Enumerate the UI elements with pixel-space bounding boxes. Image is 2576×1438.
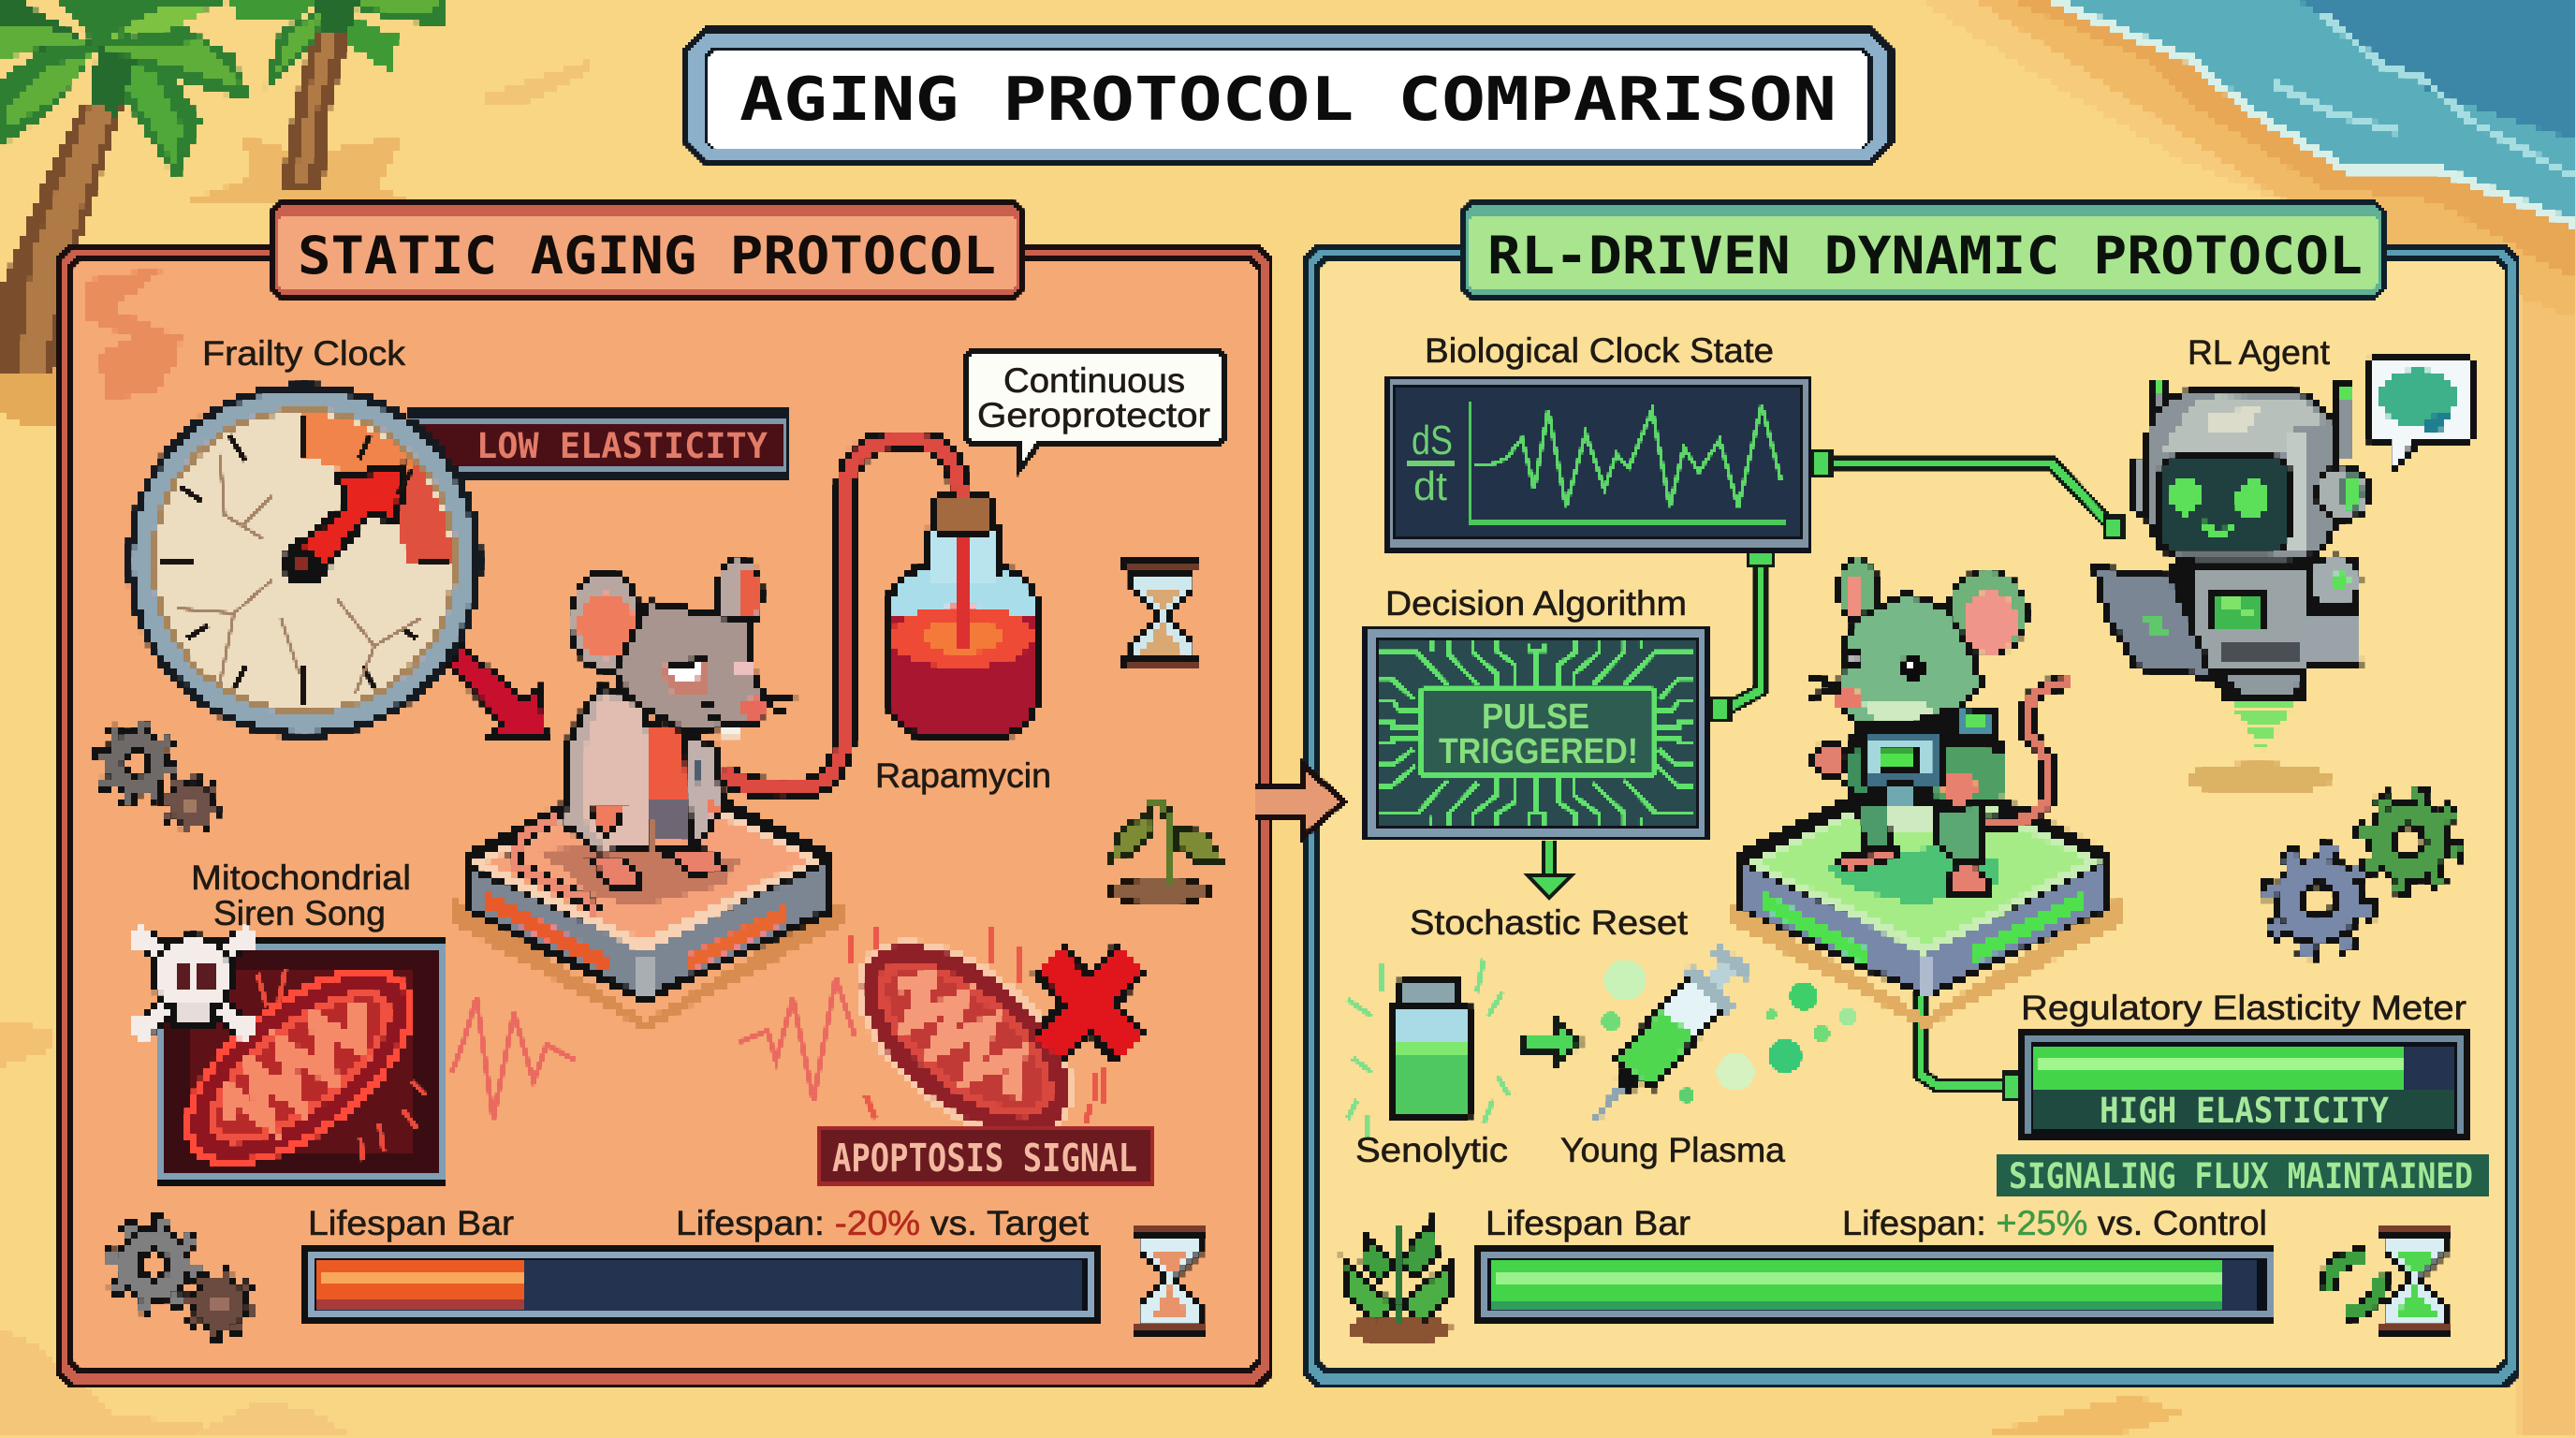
icon: hover shadow: [2186, 763, 2332, 795]
callout: continuous geroprotector: Continuous: [1003, 361, 1185, 400]
icon: sprout: [1343, 1219, 1453, 1343]
chart: pulse triggered decision board: TRIGGERED!: [1439, 732, 1638, 771]
icon: hover beam stripes: [2228, 708, 2293, 743]
icon: siren sparks: [257, 969, 426, 1161]
label: decision algorithm: Decision Algorithm: [1385, 584, 1687, 623]
lifespan bar frame left: [302, 1246, 1098, 1326]
icon: palm trees: [0, 0, 447, 374]
speech bubble: brain: [2364, 354, 2474, 476]
icon: red x: [1048, 959, 1131, 1049]
icon: rl agent robot: [2095, 377, 2372, 752]
label: senolytic: Senolytic: [1355, 1131, 1508, 1169]
label: lifespan bar dynamic: Lifespan Bar: [1486, 1204, 1690, 1242]
panel: static aging protocol: [56, 199, 1273, 1388]
label: lifespan minus 20 percent: Lifespan: -20% vs. Target: [676, 1204, 1090, 1242]
badge: apoptosis signal: [817, 1126, 1154, 1186]
panel: rl-driven dynamic protocol: [1303, 199, 2520, 1388]
icon: damaged mitochondrion: [820, 902, 1110, 1177]
illustrations: static protocol: [99, 383, 1222, 1336]
badge: low elasticity: LOW ELASTICITY: [476, 426, 768, 466]
chart: biological clock state monitor: dS: [1412, 418, 1453, 463]
title banner: [681, 26, 1895, 166]
illustrations: dynamic protocol: [1343, 354, 2474, 1343]
icon: senolytic vial: [1386, 978, 1475, 1120]
chart: regulatory elasticity meter fill: HIGH ELASTICITY: [2100, 1091, 2390, 1131]
regulatory meter frame: [2019, 1032, 2468, 1142]
chart: regulatory elasticity meter fill: [2033, 1047, 2454, 1131]
header: static aging protocol: STATIC AGING PROTOCOL: [298, 226, 996, 286]
callout: continuous geroprotector: [962, 349, 1228, 477]
icon: gears upper: [99, 726, 217, 830]
badge: low elasticity: [406, 408, 790, 479]
icon: plasma particles: [1602, 960, 1856, 1103]
chart: lifespan bar static: [316, 1260, 1082, 1311]
icon: green rl mouse in armor: [1809, 556, 2069, 892]
icon: wilted plant: [1108, 803, 1222, 906]
icon: skull and crossbones: [130, 927, 257, 1040]
chart: pulse triggered decision board: PULSE: [1482, 697, 1589, 737]
icon: young plasma syringe: [1573, 937, 1759, 1138]
icon: gears lower: [111, 1223, 251, 1335]
chart: red signal wave right: [739, 977, 855, 1100]
label: young plasma: Young Plasma: [1560, 1131, 1785, 1169]
chart: static protocol fine details: [161, 417, 1105, 1161]
icon: hourglass upper: [1123, 559, 1201, 671]
icon: clock ticks and cracks: [161, 417, 449, 704]
arrow: decline: [449, 646, 546, 738]
badge: apoptosis signal: APOPTOSIS SIGNAL: [832, 1136, 1137, 1181]
callout: continuous geroprotector: Geroprotector: [977, 396, 1210, 434]
chart: pulse triggered decision board: [1362, 625, 1710, 841]
panel: mitochondrial siren song: [151, 931, 448, 1204]
connectors: green data lines: [1711, 450, 2123, 1099]
label: biological clock state: Biological Clock State: [1425, 331, 1774, 370]
fine details: dynamic protocol: [1348, 708, 2293, 1137]
lifespan bar frame right: [1477, 1246, 2274, 1326]
icon: small reset arrow: [1525, 1020, 1582, 1065]
icon: sparks: [852, 927, 1105, 1123]
chart: biological clock state monitor: dt: [1413, 463, 1447, 509]
label: lifespan bar static: Lifespan Bar: [308, 1204, 514, 1242]
icon: rapamycin flask with iv line: [723, 442, 1043, 789]
title banner: AGING PROTOCOL COMPARISON: [739, 66, 1837, 135]
icon: frailty clock: [126, 383, 482, 739]
background: ocean and foam: [2052, 0, 2576, 225]
arrow: static to dynamic: [1256, 758, 1348, 844]
label: frailty clock: Frailty Clock: [202, 334, 406, 373]
icon: senolytic sparkles: [1348, 960, 1509, 1137]
icon: gears dynamic: [2269, 794, 2456, 950]
label: mitochondrial siren song: [191, 858, 411, 932]
badge: signaling flux maintained: SIGNALING FLUX MAINTAINED: [2009, 1156, 2473, 1196]
icon: old gray mouse in lab coat: [516, 556, 796, 915]
icon: hourglass lower: [1134, 1224, 1208, 1336]
label: rl agent: RL Agent: [2188, 333, 2331, 372]
chart: red signal wave left: [452, 998, 575, 1119]
icon: platform dynamic: [1727, 758, 2125, 1028]
arrow: to stochastic reset: [1528, 841, 1572, 898]
chart: biological clock state monitor: [1385, 375, 1812, 552]
label: mitochondrial siren song: Siren Song: [213, 894, 386, 932]
label: stochastic reset: Stochastic Reset: [1410, 903, 1689, 942]
icon: green hourglass with renewal arrows: [2329, 1224, 2452, 1336]
header: rl-driven dynamic protocol: [1460, 199, 2386, 301]
label: mitochondrial siren song: Mitochondrial: [191, 858, 411, 897]
header: static aging protocol: [270, 199, 1025, 301]
header: rl-driven dynamic protocol: RL-DRIVEN DYNAMIC PROTOCOL: [1487, 226, 2363, 286]
label: rapamycin: Rapamycin: [875, 756, 1051, 795]
label: lifespan plus 25 percent: Lifespan: +25% vs. Control: [1842, 1204, 2267, 1242]
chart: lifespan bar dynamic: [1491, 1260, 2257, 1311]
icon: platform static: [449, 758, 847, 1030]
label: regulatory elasticity meter: Regulatory Elasticity Meter: [2021, 989, 2466, 1027]
